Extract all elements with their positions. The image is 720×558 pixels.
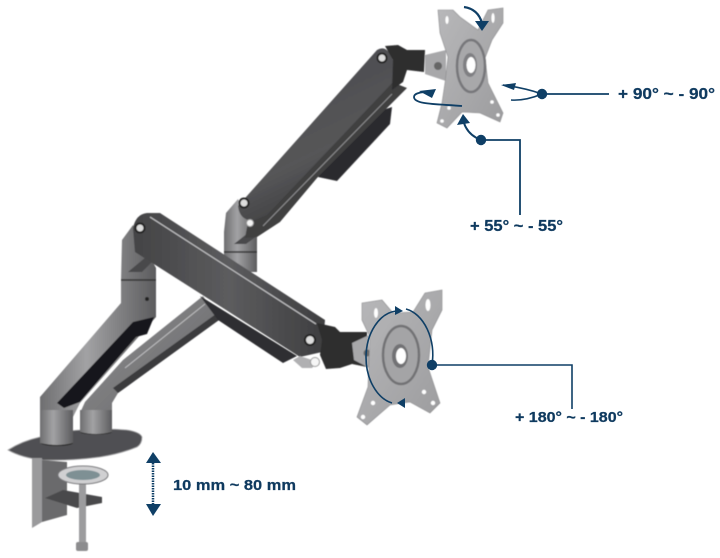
callout: +180 to -180 [366,306,623,426]
lower arm body [133,213,325,357]
desk base plate [8,410,142,460]
lower mounting plate [357,290,442,425]
upper arm body [238,48,395,220]
callout: +90 to -90 [501,83,715,103]
upper mounting plate [437,8,503,128]
upper bracket [425,50,446,81]
upper arm rail [245,82,407,238]
lower arm channel [200,296,297,363]
lower left post and diagonal [40,225,156,443]
upper arm hinge [385,45,425,90]
lower arm pivots [136,224,320,368]
lower arm hinge [317,323,367,369]
dark slot [57,317,154,408]
callout: +180 to -180: + 180° ~ - 180° [515,410,623,426]
callout: clamp thickness range [146,452,296,516]
second diagonal arm [80,296,219,432]
upper arm pivots [240,54,386,226]
swivel arrow left [414,89,462,106]
desk clamp [32,458,108,551]
callout: +90 to -90: + 90° ~ - 90° [618,86,715,103]
lower bracket [352,335,370,368]
callout: clamp thickness range: 10 mm ~ 80 mm [173,477,296,494]
monitor arm product [8,8,503,551]
tilt arrow top [464,7,489,31]
upper arm cable channel [318,107,392,181]
callout: +55 to -55: + 55° ~ - 55° [470,218,563,235]
upper arm post [224,199,257,272]
callout: +55 to -55 [457,114,563,235]
